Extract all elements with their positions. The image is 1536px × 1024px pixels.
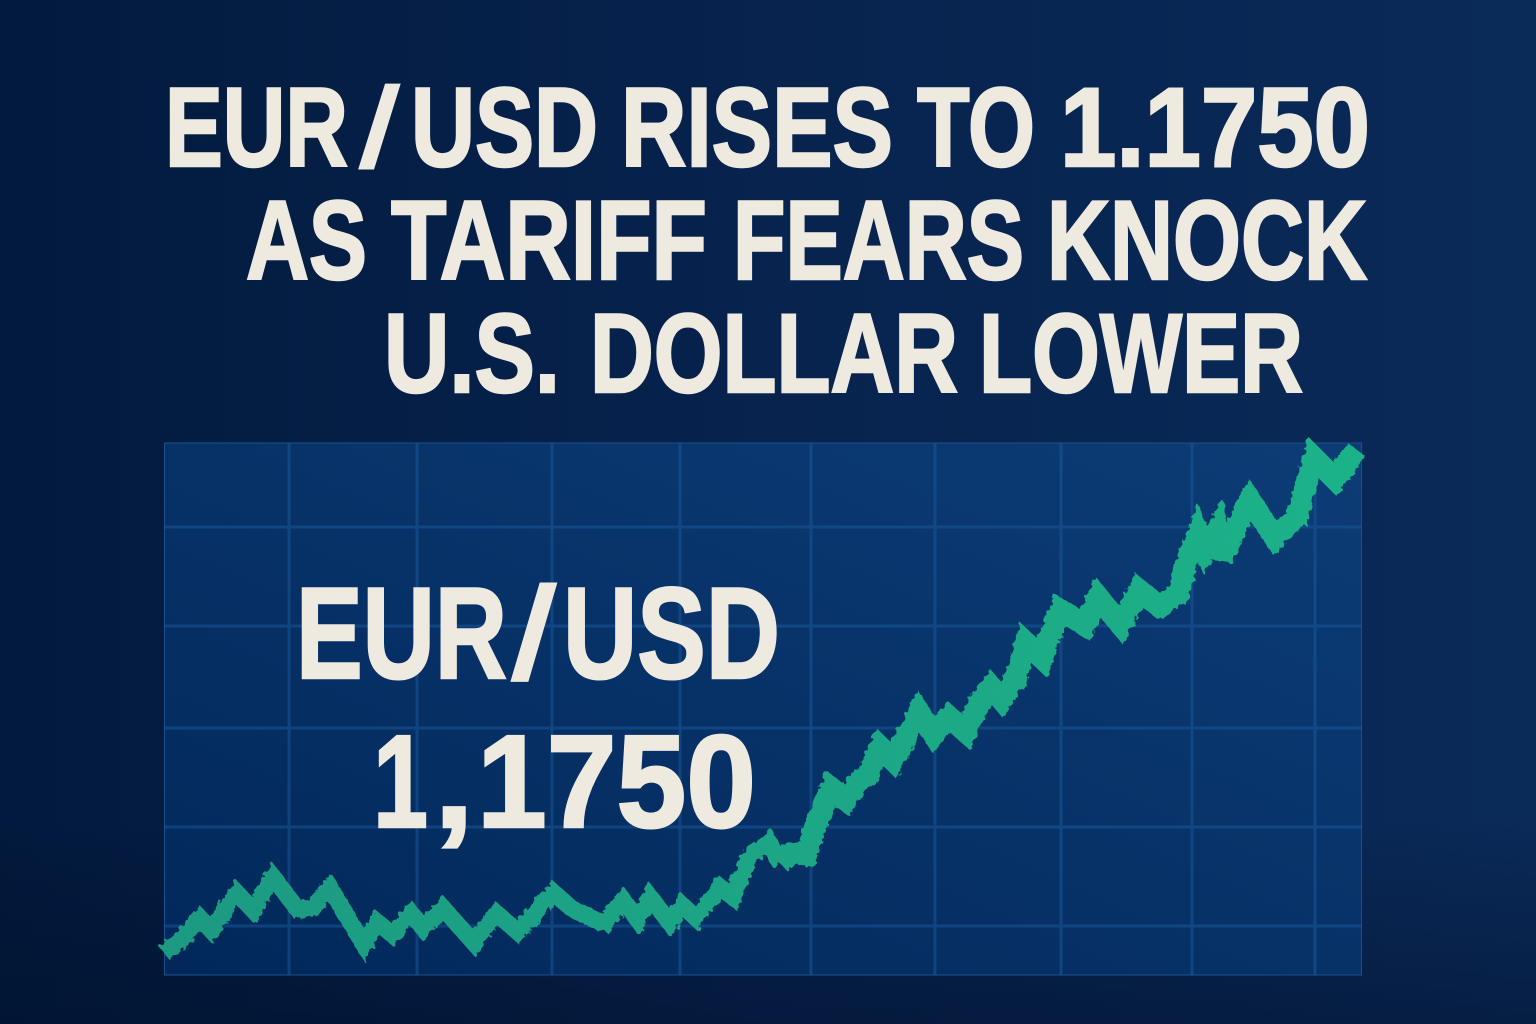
title: 1.1750 — [1060, 65, 1370, 190]
title: TO — [917, 65, 1035, 190]
panel: EUR/USD chart — [164, 443, 1362, 975]
title: AS — [246, 178, 367, 303]
title — [165, 64, 1370, 416]
title: USD — [411, 65, 598, 190]
price line — [164, 450, 1357, 953]
chart grid — [164, 443, 1362, 975]
chart label: pair: USD — [563, 560, 780, 706]
chart background — [164, 443, 1362, 975]
title: RISES — [621, 65, 893, 190]
chart label: pair: / — [508, 560, 559, 706]
chart label: rate: , — [434, 708, 474, 855]
title: EUR — [165, 65, 348, 190]
title: LOWER — [979, 291, 1303, 416]
title: FEARS — [733, 178, 1024, 303]
title: TARIFF — [391, 178, 707, 303]
title: KNOCK — [1047, 178, 1367, 303]
chart label: pair: EUR — [296, 560, 507, 706]
title: DOLLAR — [590, 291, 958, 416]
chart label: rate: 1 — [373, 708, 428, 855]
chart label: rate: 1750 — [477, 708, 756, 855]
chart label: pair — [296, 560, 780, 706]
title: U.S. — [384, 291, 560, 416]
title: / — [356, 64, 403, 190]
